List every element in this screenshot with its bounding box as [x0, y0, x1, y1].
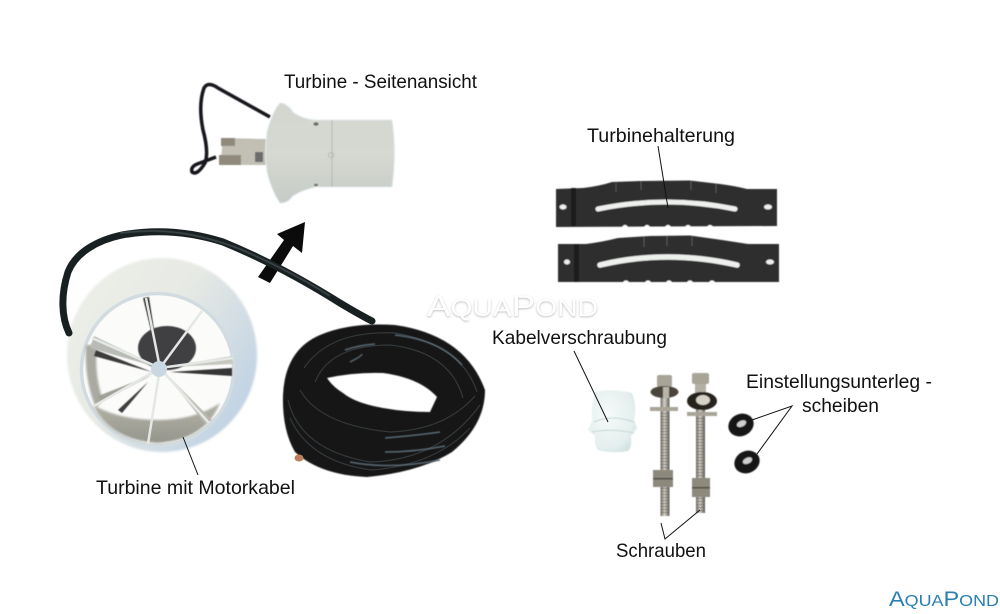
label: turbine bracket [587, 125, 735, 208]
watermark: AquaPond: AQUA POND [427, 291, 598, 324]
coil highlights [345, 335, 462, 466]
label: adjustment washers: Einstellungsunterleg - [746, 371, 932, 393]
motor housing [219, 138, 266, 165]
label: cable gland [492, 327, 667, 422]
photo: cable gland [588, 390, 637, 452]
upper bracket [556, 180, 777, 229]
screw right [687, 373, 717, 513]
lower bracket [558, 236, 779, 284]
photo: screws [650, 373, 717, 516]
label: screws: Schrauben [616, 540, 706, 562]
photo: turbine brackets [556, 180, 779, 284]
label: screws [616, 510, 706, 562]
logo: AquaPond: AQUAPOND [889, 588, 999, 611]
coil loops [288, 333, 480, 470]
cable end [294, 454, 304, 462]
turbine flange [67, 258, 257, 452]
cable [63, 232, 372, 333]
photo: turbine side view [192, 84, 394, 203]
label: adjustment washers [746, 371, 932, 454]
label: turbine with motor cable: Turbine mit Motorkabel [96, 477, 295, 499]
coil opening [327, 373, 437, 412]
turbine spokes [92, 298, 233, 444]
turbine body [266, 103, 394, 203]
photo: adjustment washers [725, 410, 763, 477]
watermark: AquaPond: AQUA POND [427, 290, 598, 323]
title: turbine side view: Turbine - Seitenansicht [284, 71, 478, 93]
label: turbine with motor cable [96, 437, 295, 499]
cable coil [283, 324, 485, 477]
label: adjustment washers: scheiben [802, 395, 879, 417]
label: cable gland: Kabelverschraubung [492, 327, 667, 349]
turbine opening [82, 294, 234, 446]
label: turbine bracket: Turbinehalterung [587, 125, 735, 147]
screw left [650, 375, 678, 516]
photo: turbine with motor cable [63, 231, 485, 477]
turbine centre cap [151, 361, 167, 377]
turbine hub [138, 326, 196, 370]
turbine inner wall [93, 403, 220, 443]
turbine blades [90, 297, 233, 424]
motor cable [192, 84, 270, 173]
arrow: side view pointer [258, 222, 305, 283]
